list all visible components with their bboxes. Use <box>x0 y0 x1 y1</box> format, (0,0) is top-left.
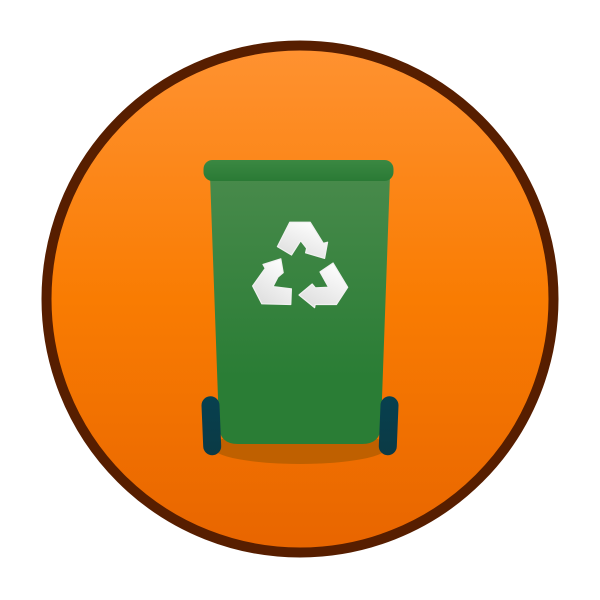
right arrow <box>299 263 348 308</box>
top arrow <box>277 222 328 258</box>
right wheel <box>379 396 399 455</box>
bin ground shadow <box>212 430 388 464</box>
bin lid <box>204 160 394 181</box>
left arrow <box>253 259 291 304</box>
recycling symbol <box>253 222 348 308</box>
left wheel <box>201 396 221 455</box>
orange circle background <box>46 46 554 552</box>
bin body <box>210 175 390 444</box>
